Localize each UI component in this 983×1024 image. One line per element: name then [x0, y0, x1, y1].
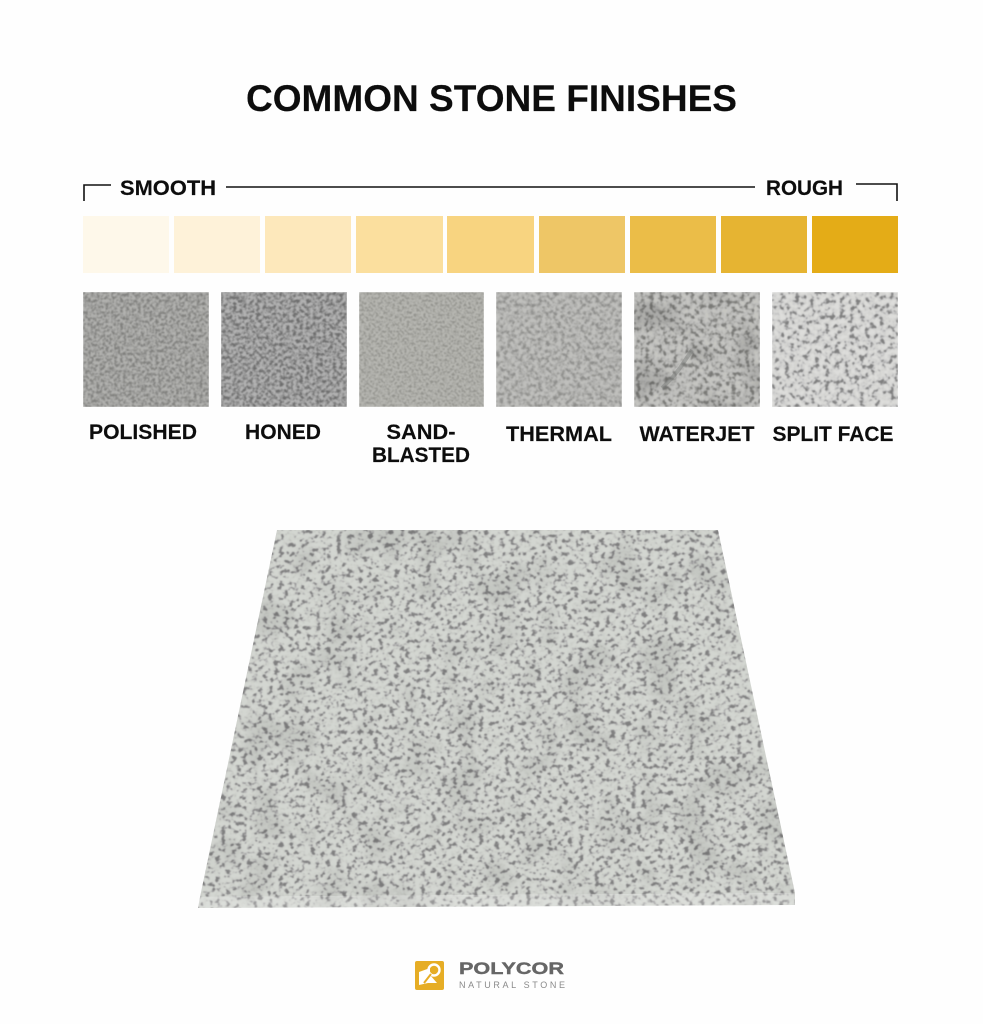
- finish: sand-blasted: SAND-: [386, 421, 456, 444]
- right bracket: [856, 184, 897, 201]
- finish: honed: HONED: [245, 421, 321, 444]
- finish: thermal: THERMAL: [506, 423, 612, 446]
- slab front edge: [198, 893, 795, 908]
- title: COMMON STONE FINISHES: [246, 78, 737, 119]
- logo: Polycor Natural Stone: [415, 959, 565, 990]
- finish: waterjet: [634, 292, 760, 446]
- finish: polished: [83, 292, 209, 444]
- slab top surface: [190, 525, 805, 910]
- scale line: [226, 186, 755, 188]
- finish: sand-blasted: [359, 292, 484, 467]
- logo icon: [415, 961, 444, 990]
- left bracket: [84, 185, 111, 201]
- roughness colour scale: [83, 216, 898, 273]
- finish: polished: POLISHED: [89, 421, 197, 444]
- finish: thermal: [496, 292, 622, 446]
- stone slab: [190, 525, 805, 912]
- label: smooth: SMOOTH: [120, 177, 216, 200]
- label: rough: ROUGH: [766, 177, 843, 200]
- finish: split face: [772, 292, 898, 446]
- logo tagline: NATURAL STONE: [459, 980, 565, 990]
- logo wordmark: POLYCOR: [459, 959, 564, 978]
- finish: sand-blasted: BLASTED: [372, 444, 470, 467]
- finish: split face: SPLIT FACE: [772, 423, 894, 446]
- finish: waterjet: WATERJET: [640, 423, 755, 446]
- finish: honed: [221, 292, 347, 444]
- smooth to rough scale header: [84, 177, 897, 201]
